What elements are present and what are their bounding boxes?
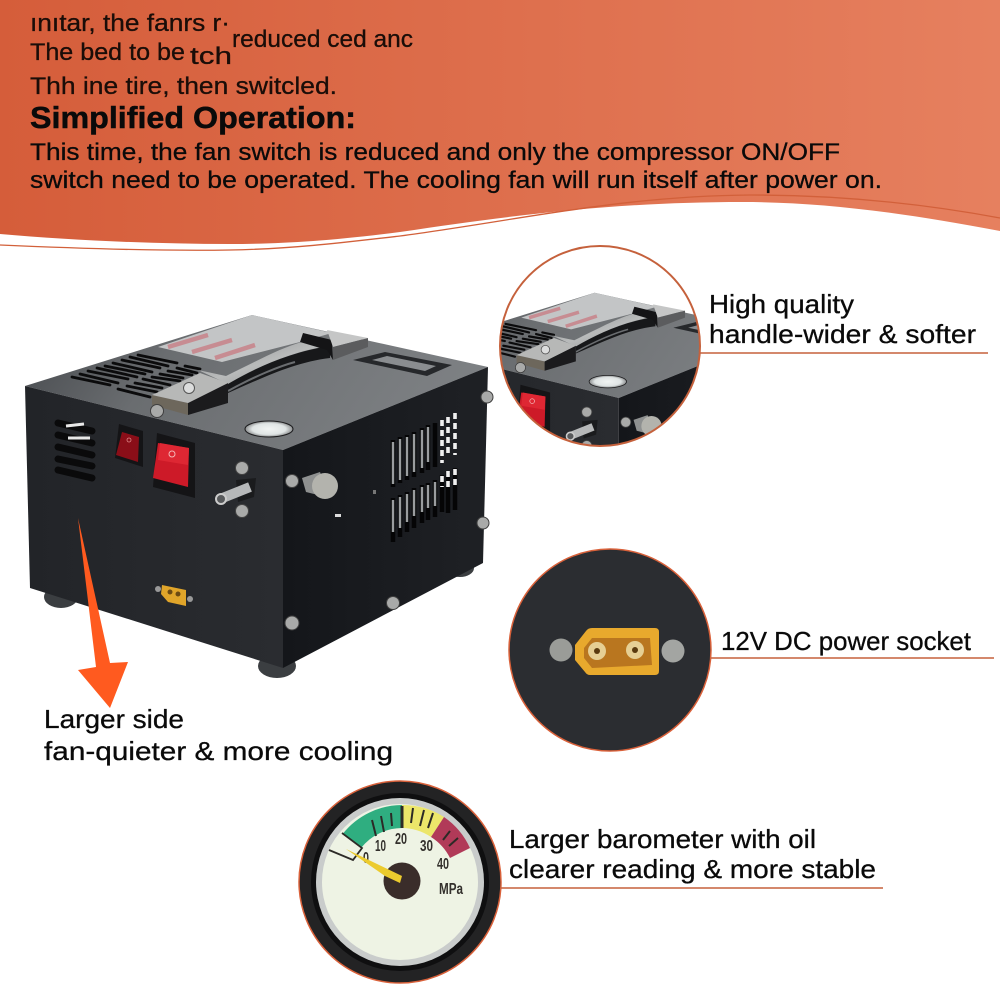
relief knob — [286, 472, 338, 499]
label: barometer: Larger barometer with oil — [509, 824, 816, 854]
orange arrow — [78, 518, 128, 708]
display window — [353, 352, 452, 376]
garbled intro text: Thh ine tire, then switcled. — [30, 73, 337, 100]
gauge numbers: 30 — [420, 838, 433, 855]
power socket — [155, 585, 193, 606]
header banner — [0, 0, 1000, 250]
callout circle: barometer — [299, 781, 501, 983]
heading: Simplified Operation: Simplified Operation: — [30, 100, 356, 135]
fan grille — [58, 423, 92, 478]
front face — [25, 386, 283, 668]
top face — [25, 315, 488, 450]
large rocker switch — [153, 433, 195, 498]
garbled intro text: The bed to be — [30, 39, 185, 66]
right screw — [662, 640, 684, 662]
left screw — [550, 638, 572, 662]
label: handle: High quality — [709, 289, 854, 319]
callout circle: power socket — [509, 549, 711, 751]
screws — [150, 391, 493, 630]
feet — [44, 559, 474, 678]
zero stop — [329, 833, 362, 860]
gauge numbers: 0 — [363, 850, 369, 867]
rear bracket — [300, 330, 368, 360]
red stripes — [168, 335, 255, 358]
gauge numbers: 40 — [437, 856, 449, 873]
compressor product illustration — [25, 315, 493, 678]
needle — [346, 849, 402, 883]
body text: This time, the fan switch is reduced and only the compressor ON/OFF — [30, 139, 840, 166]
gauge numbers: 20 — [395, 831, 407, 848]
gauge colour bands — [343, 805, 470, 858]
gauge ticks — [372, 806, 458, 846]
top vents — [72, 355, 200, 397]
body text — [30, 139, 882, 194]
label: larger side fan: fan-quieter & more cooling — [44, 736, 393, 766]
small rocker switch — [115, 424, 143, 467]
gauge numbers: 10 — [375, 838, 386, 855]
callout circle: handle — [499, 245, 701, 447]
handle plate — [158, 315, 332, 362]
label: handle: handle-wider & softer — [709, 319, 976, 349]
handle strap — [198, 342, 328, 384]
label: barometer — [501, 824, 883, 888]
garbled intro text — [30, 10, 413, 100]
pressure button — [245, 421, 293, 437]
gauge numbers — [363, 831, 463, 898]
side face — [283, 367, 488, 668]
label: larger side fan: Larger side — [44, 704, 184, 734]
front bracket — [152, 373, 228, 415]
garbled intro text: reduced ced anc — [232, 26, 413, 53]
label: handle — [700, 289, 988, 353]
body text: switch need to be operated. The cooling fan will run itself after power on. — [30, 167, 882, 194]
garbled intro text: ınıtar, the fanrs r· — [30, 10, 230, 37]
label: larger side fan — [44, 704, 393, 766]
gauge numbers: MPa — [439, 881, 463, 898]
air connector — [216, 462, 256, 518]
gauge hub — [384, 862, 420, 900]
side vents — [393, 413, 455, 542]
label: socket: 12V DC power socket — [721, 626, 972, 656]
garbled intro text: tch — [190, 43, 232, 70]
label: barometer: clearer reading & more stable — [509, 854, 876, 884]
connector — [575, 628, 659, 675]
